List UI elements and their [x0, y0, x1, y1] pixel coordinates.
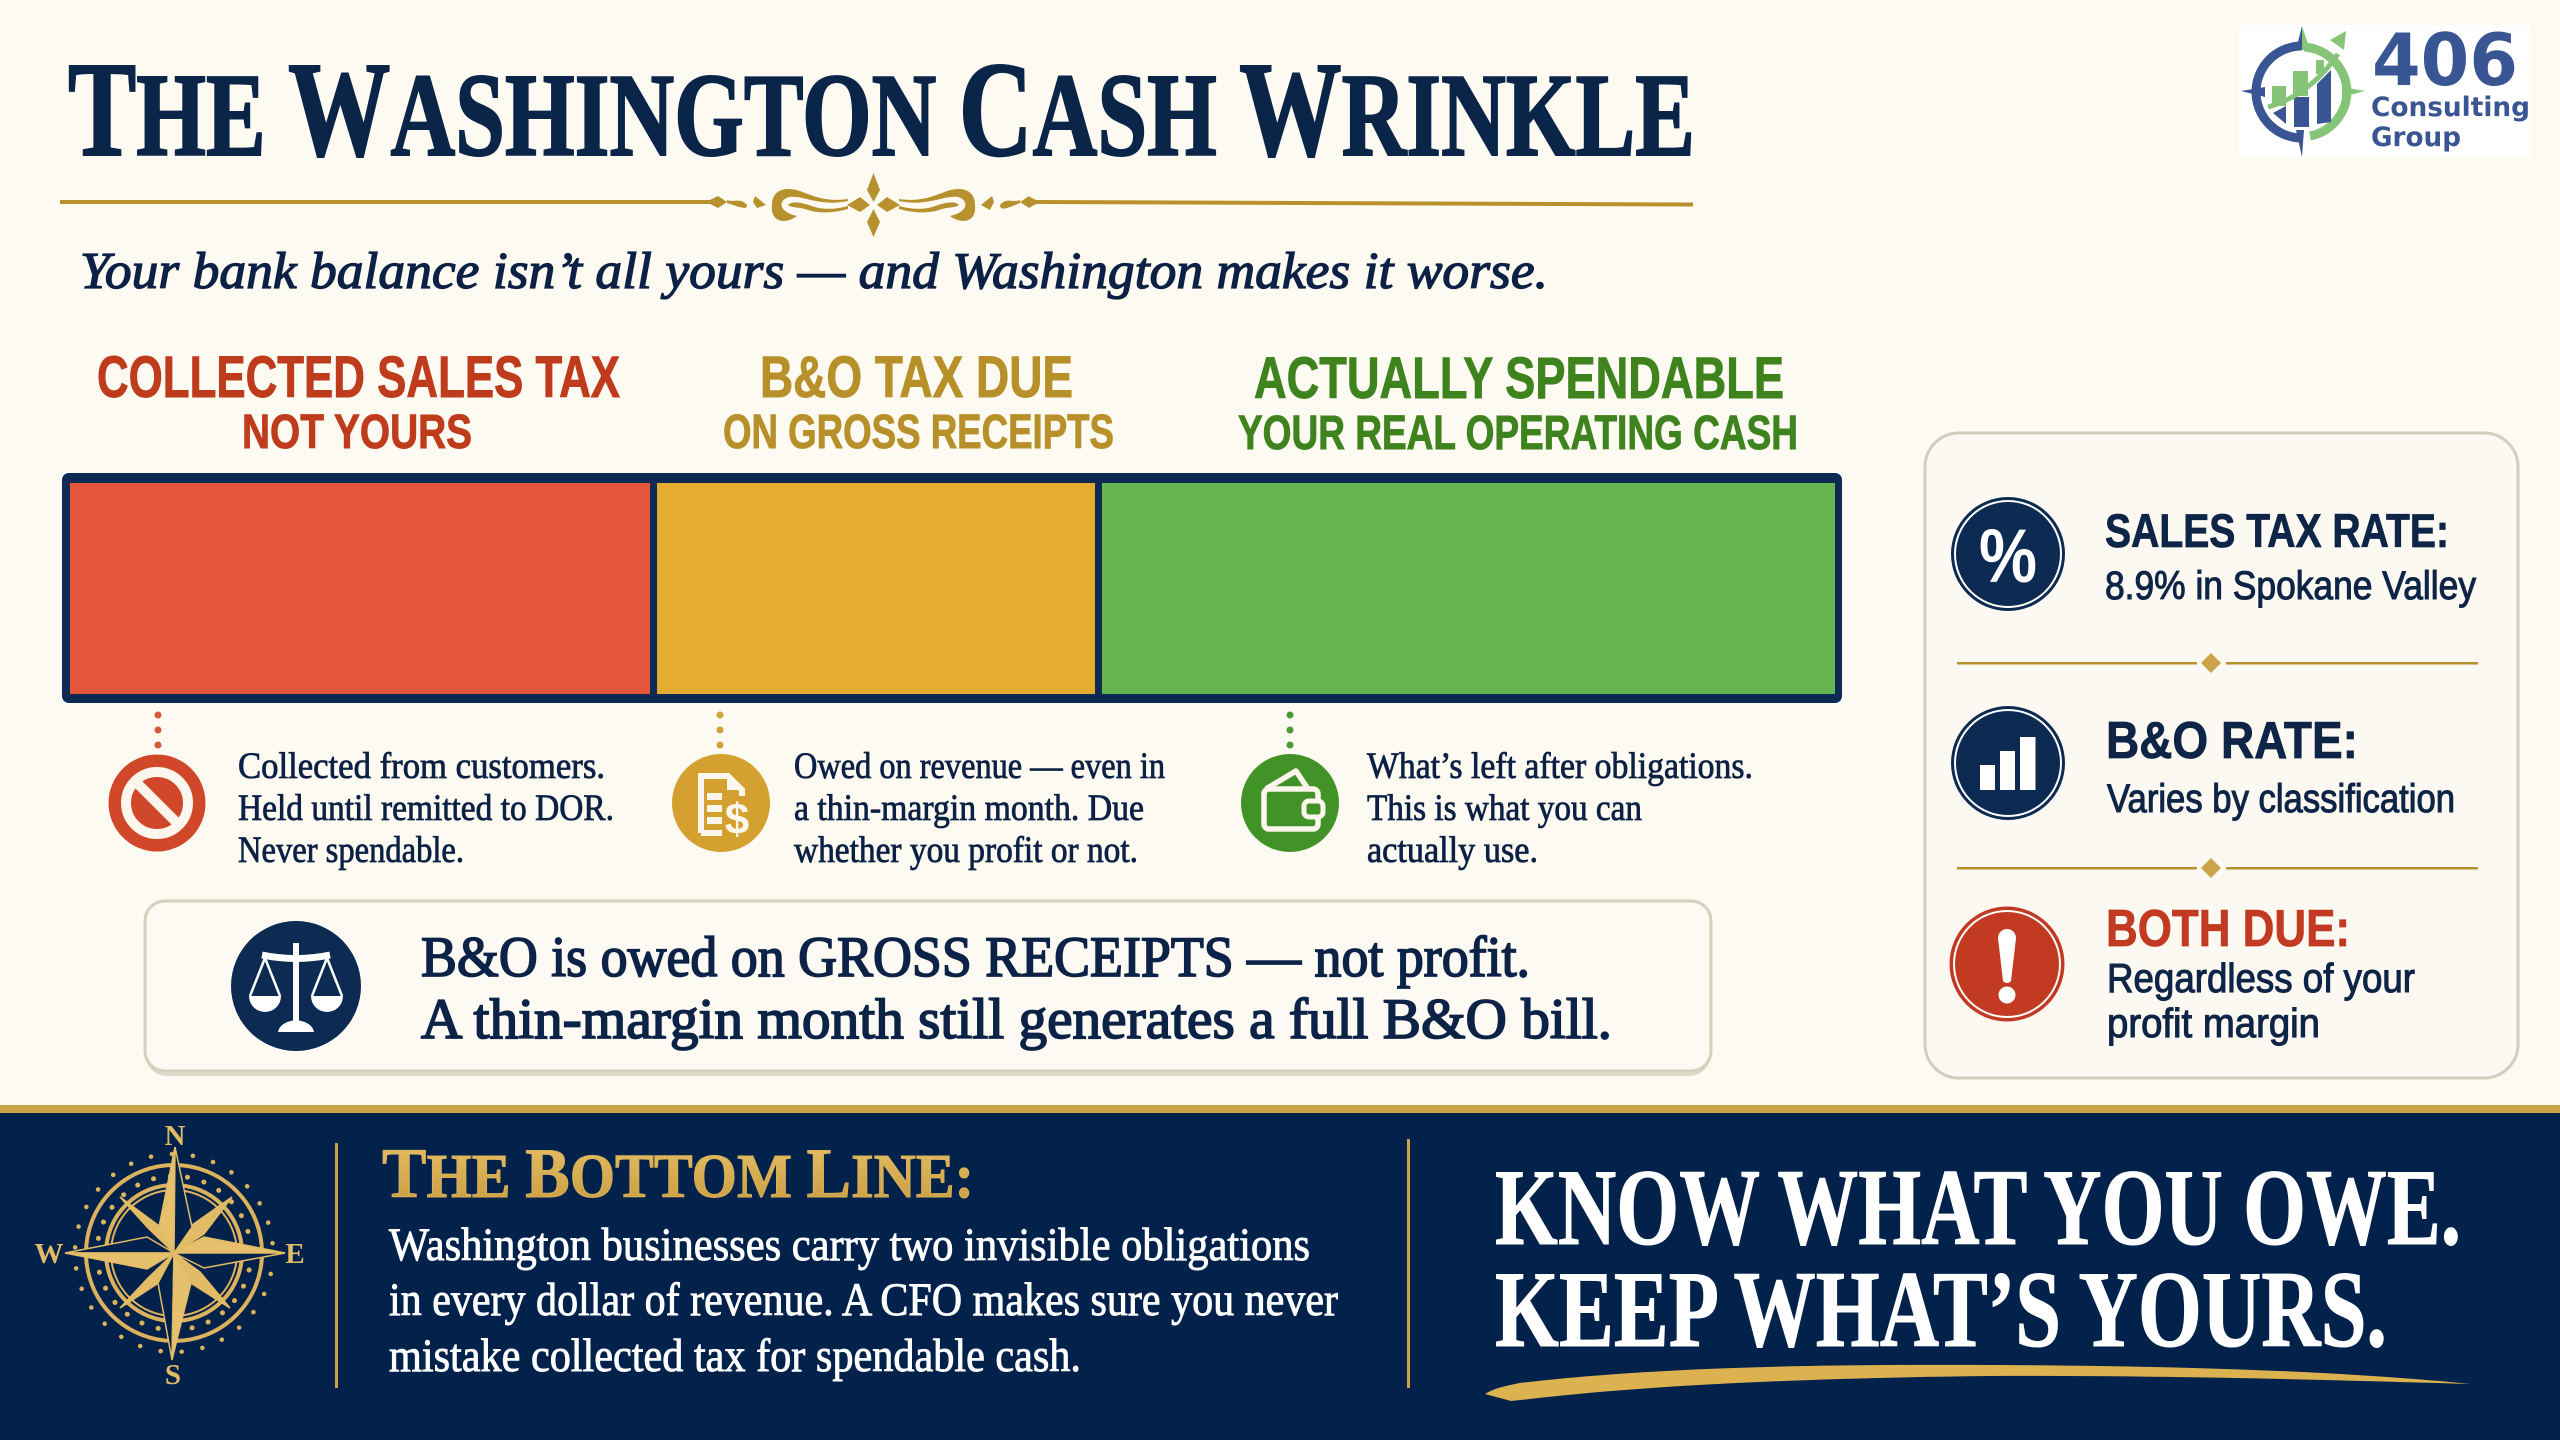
compass letters: N: [165, 1120, 186, 1152]
icon: invoice with dollar: $: [725, 795, 749, 844]
gold brush swoosh: [1485, 1365, 2470, 1401]
heading: B&O tax due: ON GROSS RECEIPTS: [723, 406, 1114, 459]
dotted connector gold: [716, 712, 724, 748]
logo text: [2371, 18, 2530, 153]
divider: compass and text: [335, 1143, 338, 1388]
text: collected description: Held until remitted to DOR.: [238, 788, 614, 829]
icon: exclamation: [1950, 906, 2064, 1022]
logo text: 406: [2372, 18, 2518, 102]
logo text: Group: [2371, 122, 2461, 153]
panel: rates: [1925, 433, 2518, 1078]
divider diamond: [1957, 858, 2478, 878]
text: both due: Regardless of your: [2107, 955, 2415, 1001]
text: B&O rate: Varies by classification: [2107, 777, 2455, 821]
callout text: A thin-margin month still generates a full B&O bill.: [421, 988, 1612, 1051]
text: B&O description: Owed on revenue — even in: [794, 746, 1165, 787]
text: bottom line body: [389, 1219, 1338, 1382]
text: B&O rate: B&O RATE:: [2106, 712, 2358, 770]
icon: percent: [1951, 497, 2065, 611]
text: sales tax rate: SALES TAX RATE:: [2105, 504, 2449, 557]
column: B&O tax: [672, 712, 1165, 871]
text: spendable description: This is what you can: [1367, 788, 1642, 829]
text: spendable description: What’s left after obligations.: [1367, 746, 1753, 787]
text: both due: BOTH DUE:: [2106, 900, 2350, 958]
icon: wallet: [1241, 754, 1339, 852]
compass letters: S: [165, 1359, 181, 1391]
text: both due: profit margin: [2107, 1000, 2320, 1046]
text: B&O description: a thin-margin month. Due: [794, 788, 1144, 829]
diagonal points: [120, 1197, 232, 1308]
logo compass mark: [2241, 26, 2365, 157]
text: sales tax rate: [2105, 504, 2476, 608]
text: spendable description: actually use.: [1367, 830, 1538, 871]
icon: scales: [231, 921, 361, 1051]
ornamental divider: [60, 173, 1693, 237]
bar segment: B&O tax: [657, 483, 1095, 694]
footer band: [0, 1105, 2560, 1440]
stacked bar: [62, 473, 1842, 703]
compass letters: [34, 1120, 305, 1391]
dotted connector red: [154, 712, 162, 748]
heading: B&O tax due: [723, 345, 1114, 459]
text: collected description: Collected from customers.: [238, 746, 605, 787]
text: collected description: Never spendable.: [238, 830, 464, 871]
text: B&O rate: [2106, 712, 2455, 821]
text: bottom line body: Washington businesses carry two invisible obligations: [389, 1219, 1310, 1271]
bar segment: spendable: [1102, 483, 1835, 694]
heading: collected sales tax: COLLECTED SALES TAX: [97, 345, 620, 410]
call to action: [1495, 1147, 2461, 1370]
heading: collected sales tax: NOT YOURS: [242, 406, 472, 459]
icon: invoice with dollar: [672, 754, 770, 852]
column: spendable: [1241, 712, 1753, 871]
text: collected description: [238, 746, 614, 871]
logo: [2239, 18, 2530, 158]
divider diamond: [1957, 653, 2478, 673]
callout text: B&O is owed on GROSS RECEIPTS — not profit.: [421, 926, 1530, 989]
callout: gross receipts: [145, 901, 1711, 1076]
icon: compass rose: [34, 1120, 305, 1391]
subtitle: Your bank balance isn’t all yours — and Washington makes it worse.: [80, 243, 1548, 300]
heading: actually spendable: [1238, 346, 1798, 460]
column: collected sales tax: [108, 712, 614, 871]
heading: actually spendable: YOUR REAL OPERATING CASH: [1238, 407, 1798, 460]
text: B&O description: whether you profit or not.: [794, 830, 1138, 871]
text: bottom line body: mistake collected tax for spendable cash.: [389, 1330, 1081, 1382]
logo text: Consulting: [2371, 92, 2530, 123]
title: THE WASHINGTON CASH WRINKLE: [68, 35, 1695, 185]
icon: prohibited sign: [108, 754, 206, 852]
dotted connector green: [1286, 712, 1294, 748]
compass letters: W: [34, 1238, 64, 1270]
heading: collected sales tax: [97, 345, 620, 459]
text: spendable description: [1367, 746, 1753, 871]
text: sales tax rate: 8.9% in Spokane Valley: [2105, 564, 2476, 608]
icon: percent: %: [1979, 514, 2037, 599]
heading: the bottom line: THE BOTTOM LINE:: [382, 1135, 974, 1213]
bar segment: collected sales tax: [70, 483, 650, 694]
compass letters: E: [285, 1238, 305, 1270]
divider: footer middle: [1407, 1139, 1410, 1388]
callout text: [421, 926, 1612, 1051]
text: B&O description: [794, 746, 1165, 871]
icon: bars: [1951, 706, 2065, 820]
cardinal points: [65, 1147, 285, 1360]
heading: actually spendable: ACTUALLY SPENDABLE: [1254, 346, 1784, 411]
text: both due: [2106, 900, 2415, 1046]
text: bottom line body: in every dollar of revenue. A CFO makes sure you never: [389, 1274, 1338, 1326]
heading: B&O tax due: B&O TAX DUE: [760, 345, 1073, 410]
